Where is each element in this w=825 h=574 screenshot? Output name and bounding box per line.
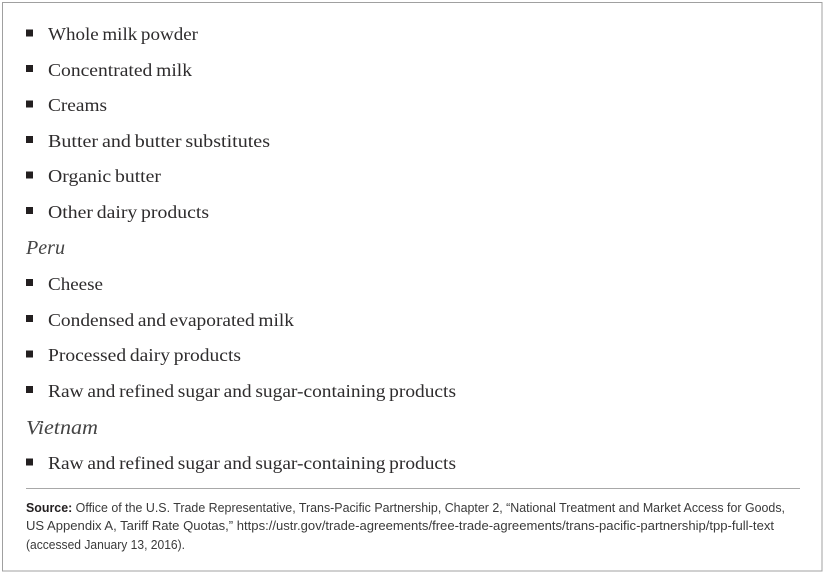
- list item: Concentrated milk: Concentrated milk: [48, 60, 192, 80]
- list item: Cheese: [26, 274, 103, 294]
- source note: (accessed January 13, 2016).: [26, 538, 185, 552]
- source note: [26, 501, 785, 552]
- list item: Whole milk powder: Whole milk powder: [48, 24, 198, 44]
- list item: Condensed and evaporated milk: Condensed and evaporated milk: [48, 310, 294, 330]
- list item: Butter and butter substitutes: Butter and butter substitutes: [48, 131, 270, 151]
- list: Vietnam products: [26, 453, 456, 473]
- list item: Creams: [26, 95, 107, 115]
- list: first country products: [26, 24, 270, 222]
- list item: Raw and refined sugar: Raw and refined sugar and sugar-containing products: [48, 381, 456, 401]
- list item: Cheese: Cheese: [48, 274, 103, 294]
- heading: Peru: Peru: [25, 237, 65, 259]
- source note: Source: Office of the U.S. Trade Representative, Trans-Pacific Partnership, Chapter 2, “National Treatment and Market Access for Goods,: [26, 501, 785, 515]
- heading: Vietnam: Vietnam: [26, 417, 98, 439]
- list item: Processed dairy products: Processed dairy products: [48, 345, 241, 365]
- list item: Other dairy products: Other dairy products: [48, 202, 209, 222]
- list item: Creams: Creams: [48, 95, 107, 115]
- list item: Organic butter: Organic butter: [48, 166, 161, 186]
- list: Peru products: [26, 274, 456, 401]
- source note: US Appendix A, Tariff Rate Quotas,” https://ustr.gov/trade-agreements/free-trade-agreements/trans-pacific-partnership/tpp-full-text: [26, 519, 775, 533]
- list item: Raw and refined sugar: Raw and refined sugar and sugar-containing products: [48, 453, 456, 473]
